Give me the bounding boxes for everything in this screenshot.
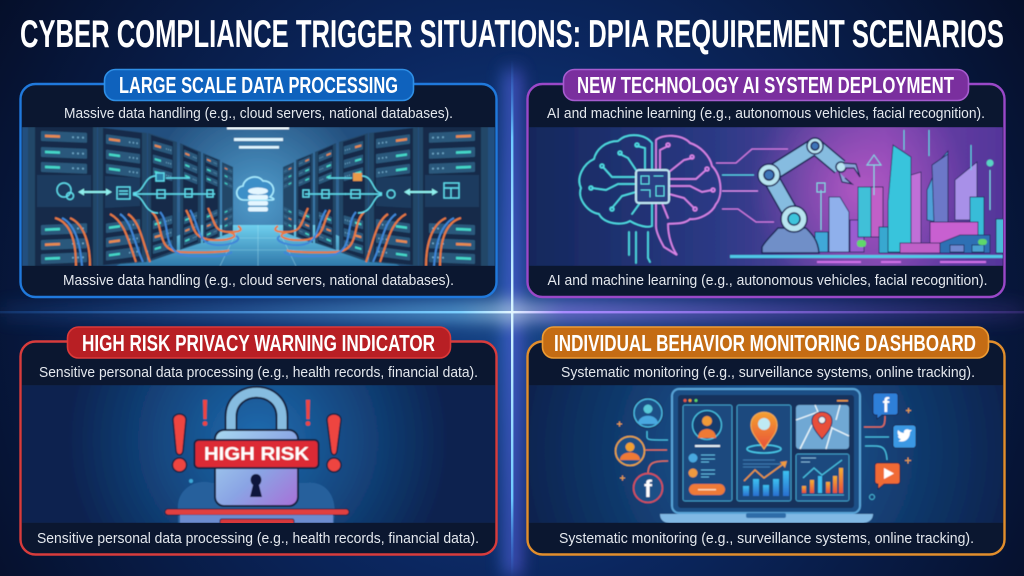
icon: exclamation marks	[172, 400, 341, 472]
dashboard: location and chart	[737, 405, 791, 501]
panel frame	[528, 84, 1004, 297]
icon: circuit brain	[579, 135, 721, 263]
caption bottom: AI and machine learning (e.g., autonomous vehicles, facial recognition).	[548, 273, 988, 289]
dashboard: map	[796, 405, 849, 449]
panel: large scale data processing	[20, 70, 496, 297]
dashboard: profile card	[683, 405, 732, 501]
icon: high risk banner	[194, 440, 318, 468]
caption top: Sensitive personal data processing (e.g., health records, financial data).	[39, 365, 478, 381]
icon: cloud database	[237, 177, 274, 212]
caption bottom: Sensitive personal data processing (e.g., health records, financial data).	[37, 531, 479, 547]
caption top: AI and machine learning (e.g., autonomous vehicles, facial recognition).	[547, 106, 985, 122]
icons: people and facebook circles: f	[644, 476, 653, 503]
dashboard: bar chart	[796, 454, 849, 501]
pill heading: LARGE SCALE DATA PROCESSING	[119, 72, 398, 98]
icon: high risk banner: HIGH RISK	[204, 443, 310, 464]
pill heading	[104, 70, 414, 100]
icon: robot arm	[758, 138, 860, 253]
caption bottom: Massive data handling (e.g., cloud servers, national databases).	[63, 273, 454, 289]
panel: new technology AI system deployment	[528, 70, 1004, 297]
panel frame	[20, 84, 496, 297]
icons: social media bubbles: f	[883, 395, 890, 417]
icons: people and facebook circles	[616, 398, 668, 503]
pill heading	[68, 327, 450, 358]
illustration: AI brain, robot arm and city	[529, 127, 1004, 266]
panel: high risk privacy warning indicator	[20, 327, 496, 554]
icons: social media bubbles	[617, 393, 916, 500]
pill heading: HIGH RISK PRIVACY WARNING INDICATOR	[82, 330, 435, 356]
panel frame	[20, 342, 496, 554]
laptop	[660, 389, 873, 523]
panel: individual behavior monitoring dashboard	[528, 327, 1004, 554]
icon: futuristic city	[815, 145, 1004, 253]
caption top: Massive data handling (e.g., cloud servers, national databases).	[64, 106, 453, 122]
illustration: padlock	[22, 385, 495, 525]
caption top: Systematic monitoring (e.g., surveillance systems, online tracking).	[561, 365, 975, 381]
panel frame	[528, 342, 1004, 554]
illustration: server room	[22, 127, 495, 266]
illustration: laptop dashboard	[529, 385, 1003, 523]
caption bottom: Systematic monitoring (e.g., surveillance systems, online tracking).	[559, 531, 974, 547]
